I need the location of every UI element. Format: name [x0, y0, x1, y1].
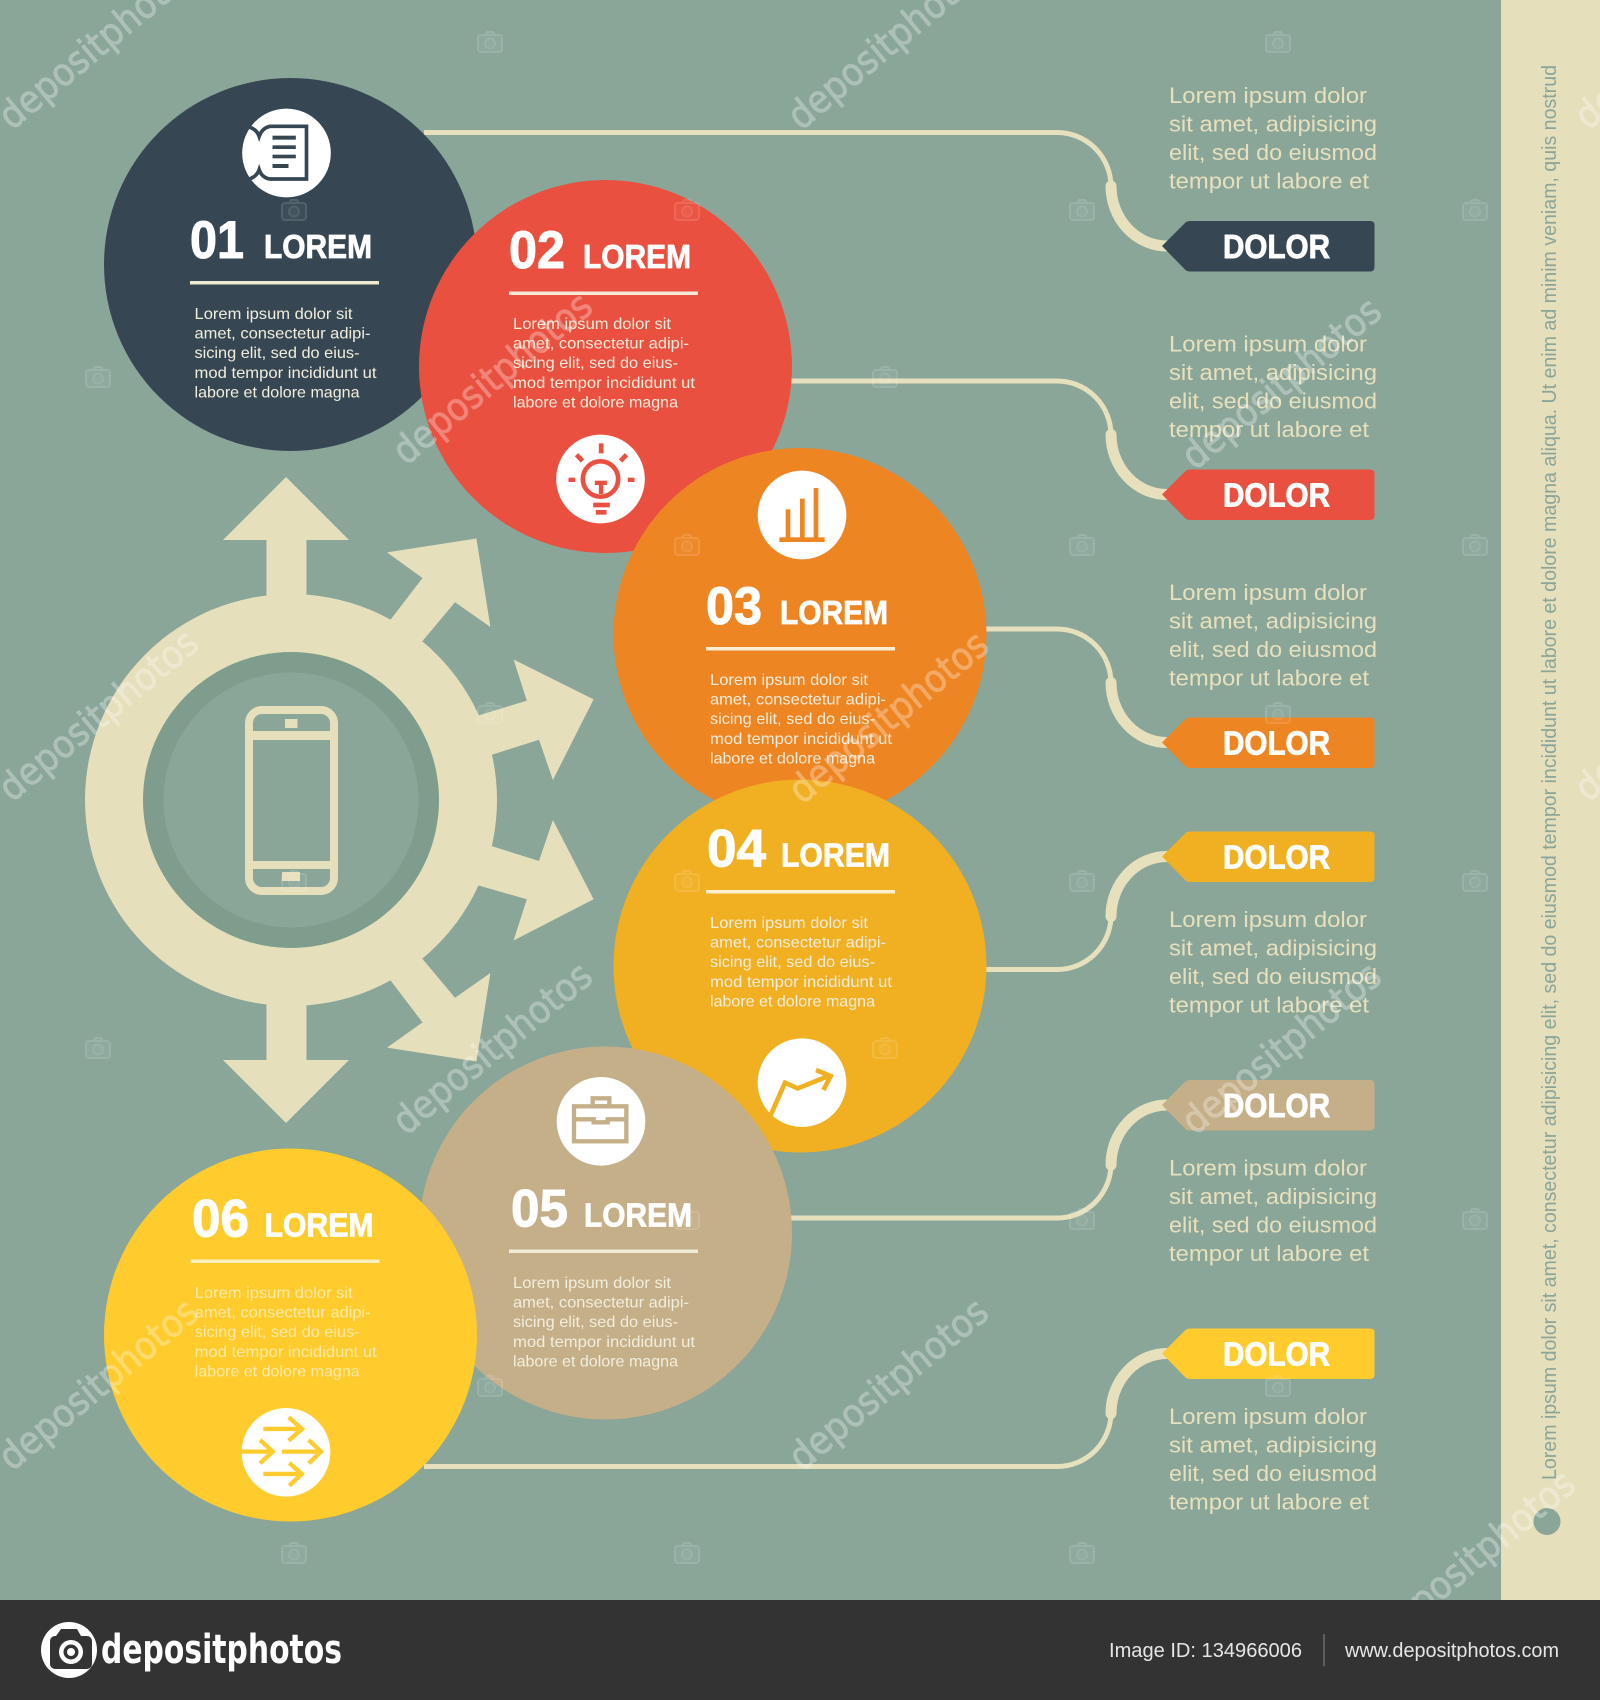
connector 3	[985, 629, 1167, 742]
rule 06	[190, 1260, 380, 1263]
hub inner disc	[143, 652, 439, 948]
body 04: amet, consectetur adipi-	[710, 935, 886, 952]
icon: flow arrows	[241, 1408, 330, 1497]
body 02: Lorem ipsum dolor sit	[513, 316, 672, 333]
heading 05	[511, 1180, 692, 1239]
circle 05	[419, 1046, 792, 1420]
body 06: mod tempor incididunt ut	[195, 1344, 377, 1361]
body 06: Lorem ipsum dolor sit	[195, 1285, 353, 1302]
watermark layer: depositphotos	[780, 622, 997, 812]
body 04: sicing elit, sed do eius-	[710, 954, 875, 971]
body 05: Lorem ipsum dolor sit	[513, 1275, 672, 1292]
body 01: mod tempor incididunt ut	[194, 365, 377, 382]
label tag 2: DOLOR	[1223, 476, 1330, 514]
body 04: mod tempor incididunt ut	[710, 974, 893, 991]
body 05: labore et dolore magna	[513, 1353, 678, 1370]
heading 06: LOREM	[264, 1207, 374, 1244]
text block row 4: elit, sed do eiusmod	[1169, 964, 1377, 989]
arrow: down	[223, 990, 349, 1123]
rule 02	[509, 292, 698, 295]
icon: light bulb	[556, 435, 645, 523]
rule 05	[509, 1250, 698, 1253]
heading 02: 02	[509, 221, 565, 280]
body 05: mod tempor incididunt ut	[513, 1334, 696, 1351]
text block row 5: elit, sed do eiusmod	[1169, 1212, 1377, 1238]
body 01: amet, consectetur adipi-	[194, 326, 370, 343]
text block row 5: tempor ut labore et	[1169, 1241, 1369, 1266]
panel 06	[104, 1148, 477, 1522]
icon: trend arrow	[758, 1038, 846, 1127]
body 02: sicing elit, sed do eius-	[513, 355, 678, 372]
text block row 1: tempor ut labore et	[1169, 168, 1369, 194]
label tag 4	[1162, 832, 1374, 882]
circle 04	[614, 780, 986, 1152]
text block row 3	[1169, 580, 1377, 690]
body 06	[195, 1285, 377, 1380]
body 04: Lorem ipsum dolor sit	[710, 915, 869, 932]
body 01	[194, 306, 377, 401]
body 06: amet, consectetur adipi-	[195, 1305, 371, 1322]
watermark layer: depositphotos	[1173, 953, 1390, 1143]
icon: document	[242, 109, 331, 197]
text block row 6	[1169, 1404, 1377, 1514]
heading 01	[190, 211, 372, 270]
panel 01	[104, 78, 477, 451]
heading 03	[706, 577, 888, 636]
body 03: labore et dolore magna	[710, 750, 875, 767]
text block row 4: Lorem ipsum dolor	[1169, 907, 1367, 932]
body 06: labore et dolore magna	[195, 1363, 360, 1380]
connector 5	[790, 1105, 1167, 1218]
circle 03	[614, 448, 986, 821]
circle 02	[419, 180, 792, 553]
watermark layer: depositphotos	[1173, 288, 1390, 478]
heading 06: 06	[192, 1190, 249, 1249]
arrow: up	[223, 477, 349, 610]
label tag 3	[1162, 718, 1374, 768]
heading 02	[509, 221, 691, 280]
body 05: amet, consectetur adipi-	[513, 1295, 689, 1312]
body 02	[513, 316, 696, 411]
panel 05	[419, 1046, 792, 1420]
label tag 1: DOLOR	[1223, 228, 1330, 265]
watermark layer: depositphotos	[780, 1289, 997, 1479]
text block row 2: sit amet, adipisicing	[1169, 360, 1377, 385]
heading 05: LOREM	[584, 1197, 692, 1234]
icon: bar chart	[758, 471, 846, 559]
text block row 3: Lorem ipsum dolor	[1169, 580, 1367, 605]
label tag 3: DOLOR	[1223, 724, 1330, 762]
heading 01: 01	[190, 211, 244, 270]
text block row 6: tempor ut labore et	[1169, 1490, 1369, 1514]
body 02: mod tempor incididunt ut	[513, 375, 696, 392]
body 03: mod tempor incididunt ut	[710, 731, 893, 748]
watermark layer: depositphotos	[384, 283, 601, 473]
body 05: sicing elit, sed do eius-	[513, 1314, 678, 1331]
rule 03	[706, 647, 895, 650]
circle 01	[104, 78, 477, 451]
heading 04	[707, 820, 890, 879]
body 04: labore et dolore magna	[710, 993, 875, 1010]
site url: www.depositphotos.com	[1344, 1640, 1559, 1662]
footer logo	[41, 1622, 342, 1678]
text block row 2: elit, sed do eiusmod	[1169, 388, 1377, 414]
vertical paragraph: Lorem ipsum dolor sit amet, consectetur adipisicing elit, sed do eiusmod tempor incididunt ut labore et dolore magna aliqua. Ut enim ad minim veniam, quis nostrud	[1539, 65, 1561, 1480]
icon: briefcase	[557, 1077, 645, 1166]
circle 06	[104, 1148, 477, 1522]
body 01: sicing elit, sed do eius-	[194, 345, 360, 362]
image id: Image ID: 134966006	[1109, 1640, 1302, 1662]
body 02: amet, consectetur adipi-	[513, 336, 689, 353]
central hub with radiating arrows	[85, 477, 594, 1123]
text block row 2	[1169, 332, 1377, 442]
text block row 5: Lorem ipsum dolor	[1169, 1156, 1367, 1180]
connector 1	[424, 132, 1167, 246]
icon: smartphone	[249, 710, 334, 891]
text block row 3: elit, sed do eiusmod	[1169, 637, 1377, 662]
arrow: right lower	[470, 820, 594, 940]
label tag 5	[1162, 1080, 1374, 1130]
label tag 4: DOLOR	[1223, 838, 1330, 876]
heading 05: 05	[511, 1180, 568, 1239]
hub core	[164, 672, 418, 928]
text block row 4: tempor ut labore et	[1169, 992, 1369, 1018]
rule 01	[190, 281, 379, 284]
text block row 5: sit amet, adipisicing	[1169, 1184, 1377, 1209]
connector 2	[790, 381, 1167, 494]
text block row 1: sit amet, adipisicing	[1169, 112, 1377, 136]
text block row 6: Lorem ipsum dolor	[1169, 1404, 1367, 1429]
heading 06	[192, 1190, 374, 1249]
panel 03	[614, 448, 986, 821]
footer logo: depositphotos	[101, 1627, 342, 1673]
text block row 2: Lorem ipsum dolor	[1169, 332, 1367, 356]
panel 04	[614, 780, 986, 1152]
text block row 5	[1169, 1156, 1377, 1266]
body 02: labore et dolore magna	[513, 394, 678, 411]
arrow: up right	[375, 538, 490, 650]
label tag 1	[1162, 221, 1374, 272]
text block row 1: Lorem ipsum dolor	[1169, 83, 1367, 108]
watermark layer: depositphotos	[384, 953, 601, 1143]
label tag 2	[1162, 470, 1374, 520]
body 04	[710, 915, 893, 1010]
heading 04: LOREM	[781, 837, 890, 874]
body 01: Lorem ipsum dolor sit	[194, 306, 353, 323]
connector 4	[985, 856, 1167, 970]
body 03: sicing elit, sed do eius-	[710, 711, 875, 728]
body 05	[513, 1275, 696, 1370]
heading 03: LOREM	[780, 594, 888, 631]
heading 02: LOREM	[583, 238, 691, 275]
body 03: amet, consectetur adipi-	[710, 692, 886, 709]
text block row 3: sit amet, adipisicing	[1169, 608, 1377, 634]
arrow: right upper	[470, 660, 594, 780]
label tag 5: DOLOR	[1223, 1087, 1330, 1124]
footer bar	[0, 1600, 1600, 1700]
heading 03: 03	[706, 577, 762, 636]
rule 04	[706, 890, 895, 894]
body 01: labore et dolore magna	[194, 384, 360, 401]
hub ring	[85, 594, 497, 1006]
label tag 6: DOLOR	[1223, 1336, 1330, 1372]
body 06: sicing elit, sed do eius-	[195, 1324, 360, 1341]
text block row 6: sit amet, adipisicing	[1169, 1432, 1377, 1458]
text block row 1: elit, sed do eiusmod	[1169, 140, 1377, 165]
body 03	[710, 672, 893, 767]
text block row 3: tempor ut labore et	[1169, 666, 1369, 690]
heading 01: LOREM	[264, 228, 372, 265]
heading 04: 04	[707, 820, 767, 879]
watermark layer: depositphotos	[1367, 1461, 1584, 1651]
body 03: Lorem ipsum dolor sit	[710, 672, 869, 689]
side panel: vertical text rail	[1501, 0, 1600, 1600]
text block row 2: tempor ut labore et	[1169, 417, 1369, 442]
rail dot	[1534, 1508, 1560, 1535]
text block row 4: sit amet, adipisicing	[1169, 936, 1377, 960]
text block row 4	[1169, 907, 1377, 1018]
connector 6	[424, 1354, 1167, 1466]
text block row 1	[1169, 83, 1377, 194]
arrow: down right	[375, 950, 490, 1062]
text block row 6: elit, sed do eiusmod	[1169, 1461, 1377, 1486]
panel 02	[419, 180, 792, 553]
label tag 6	[1162, 1328, 1374, 1379]
